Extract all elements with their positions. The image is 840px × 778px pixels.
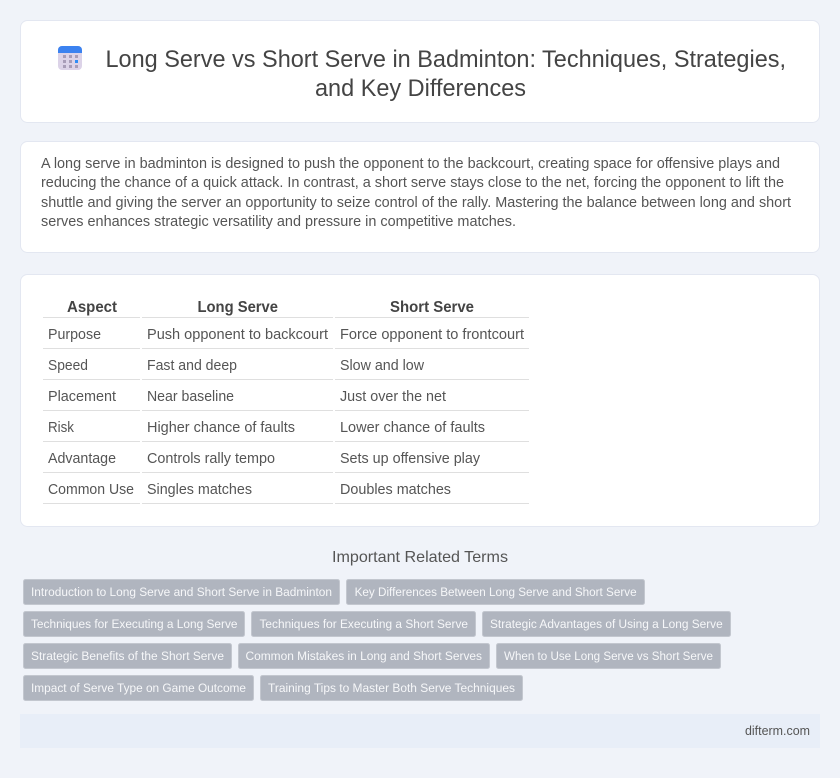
tag (238, 644, 490, 668)
text block: description paragraph: reducing the chance of a quick attack. In contrast, a short serve stays close to the net, forcing the opponent to lift the (41, 175, 784, 191)
table row: common use: Common Use (48, 482, 134, 498)
table row: common use (48, 482, 451, 498)
tag (24, 580, 340, 604)
tag (24, 644, 232, 668)
tag: Common Mistakes in Long and Short Serves (246, 649, 482, 663)
heading: important related terms: Important Related Terms (332, 549, 508, 566)
tag (260, 676, 522, 700)
title (106, 46, 786, 102)
table header: Long Serve (198, 299, 278, 316)
footer (20, 714, 820, 748)
tag (24, 612, 244, 636)
tag (496, 644, 720, 668)
icon: calendar (58, 46, 82, 70)
tag: Strategic Benefits of the Short Serve (31, 649, 224, 663)
table row: speed: Fast and deep (147, 358, 237, 374)
table row: purpose (48, 327, 524, 343)
title: and Key Differences (315, 75, 526, 102)
footer: difterm.com (745, 723, 810, 738)
table row: placement (48, 389, 446, 405)
tag: Key Differences Between Long Serve and Short Serve (355, 585, 637, 599)
table row: placement: Just over the net (340, 389, 446, 405)
text block: description paragraph: A long serve in badminton is designed to push the opponent to the backcourt, creating space for offensive plays and (41, 156, 780, 172)
table row: speed: Slow and low (340, 358, 425, 374)
text block: description paragraph (41, 156, 791, 230)
tag: When to Use Long Serve vs Short Serve (504, 649, 713, 663)
tag: Training Tips to Master Both Serve Techniques (268, 681, 515, 695)
table row: risk (48, 420, 485, 436)
tag: Introduction to Long Serve and Short Serve in Badminton (31, 585, 332, 599)
title: Long Serve vs Short Serve in Badminton: Techniques, Strategies, (106, 46, 786, 73)
table row: placement: Placement (48, 389, 116, 405)
table header: Short Serve (390, 299, 474, 316)
table row: advantage (48, 451, 481, 467)
table header (67, 299, 474, 316)
text block: description paragraph: shuttle and giving the server an opportunity to seize control of the rally. Mastering the balance between long and short (41, 195, 791, 211)
tag (346, 580, 644, 604)
text block: description paragraph: serves enhances strategic versatility and pressure in competitive matches. (41, 214, 516, 230)
table row: risk: Higher chance of faults (147, 420, 295, 436)
tag (252, 612, 476, 636)
panel: title card (20, 20, 820, 122)
table header: Aspect (67, 299, 118, 316)
panel: comparison table (20, 274, 820, 526)
table row: advantage: Sets up offensive play (340, 451, 481, 467)
table row: purpose: Force opponent to frontcourt (340, 327, 524, 343)
tag (24, 676, 254, 700)
tags: related terms (24, 580, 730, 700)
table row: placement: Near baseline (147, 389, 234, 405)
table row: speed (48, 358, 425, 374)
table row: purpose: Push opponent to backcourt (147, 327, 328, 343)
table row: risk: Lower chance of faults (340, 420, 485, 436)
table row: common use: Doubles matches (340, 482, 451, 498)
table row: risk: Risk (48, 420, 75, 436)
tag: Techniques for Executing a Long Serve (31, 617, 238, 631)
tag: Strategic Advantages of Using a Long Serve (490, 617, 723, 631)
table row: speed: Speed (48, 358, 88, 374)
table row: common use: Singles matches (147, 482, 252, 498)
table row: advantage: Controls rally tempo (147, 451, 275, 467)
tag: Impact of Serve Type on Game Outcome (31, 681, 246, 695)
tag (482, 612, 730, 636)
panel: description (20, 142, 820, 252)
table row: advantage: Advantage (48, 451, 116, 467)
tag: Techniques for Executing a Short Serve (260, 617, 468, 631)
table row: purpose: Purpose (48, 327, 101, 343)
